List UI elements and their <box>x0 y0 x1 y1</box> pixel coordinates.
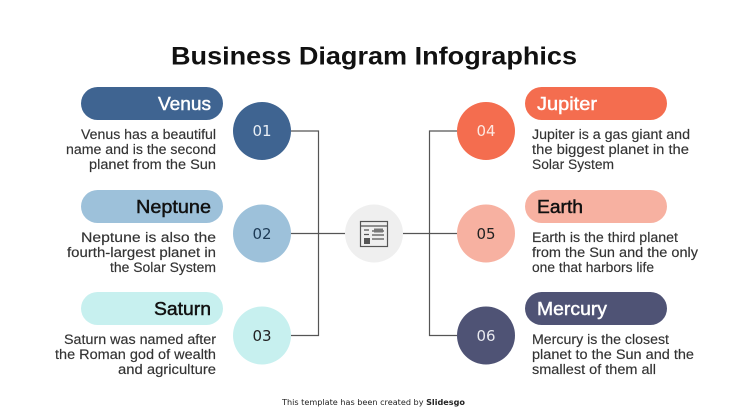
text: Neptune description: Neptune is also the <box>81 230 216 245</box>
number circle 06: 06 <box>476 327 496 345</box>
heading: Earth: Earth <box>537 197 583 217</box>
heading: Earth <box>525 190 667 223</box>
text: Venus description: planet from the Sun <box>89 157 216 172</box>
number circle 01 <box>233 102 291 160</box>
connector lines <box>291 131 457 336</box>
panel: Neptune <box>67 190 291 275</box>
number circle 05: 05 <box>476 225 496 243</box>
number circle 04 <box>457 102 515 160</box>
number circle 02 <box>233 204 291 262</box>
heading: Mercury <box>525 292 667 325</box>
heading: Mercury: Mercury <box>537 299 607 319</box>
text: Neptune description: fourth-largest planet in <box>67 245 216 260</box>
heading: Venus <box>81 87 223 120</box>
heading: Saturn <box>81 292 223 325</box>
heading: Neptune: Neptune <box>136 197 211 217</box>
text: Jupiter description: Jupiter is a gas giant and <box>532 127 690 142</box>
text: Mercury description: planet to the Sun and the <box>532 347 694 362</box>
number circle 04: 04 <box>476 122 496 140</box>
icon: central browser dashboard <box>345 204 403 262</box>
heading: Saturn: Saturn <box>154 299 211 319</box>
number circle 01: 01 <box>252 122 272 140</box>
text: Saturn description: and agriculture <box>118 362 216 377</box>
number circle 02: 02 <box>252 225 272 243</box>
title: Business Diagram Infographics <box>171 42 577 70</box>
text: Jupiter description: Solar System <box>532 157 614 172</box>
heading: Venus: Venus <box>158 94 211 114</box>
text: Venus description: Venus has a beautiful <box>81 127 216 142</box>
text: Mercury description: Mercury is the closest <box>532 332 669 347</box>
text: Earth description: one that harbors life <box>532 260 654 275</box>
panel: Venus <box>66 87 291 172</box>
panel: Saturn <box>55 292 291 377</box>
text: Neptune description: the Solar System <box>110 260 216 275</box>
panel: Earth <box>457 190 698 275</box>
number circle 03: 03 <box>252 327 272 345</box>
footer credit: This template has been created by Slidesgo <box>281 398 466 407</box>
heading: Neptune <box>81 190 223 223</box>
panel: Jupiter <box>457 87 690 172</box>
text: Jupiter description: the biggest planet in the <box>532 142 689 157</box>
heading: Jupiter <box>525 87 667 120</box>
number circle 06 <box>457 306 515 364</box>
text: Earth description: from the Sun and the only <box>532 245 698 260</box>
text: Earth description: Earth is the third planet <box>532 230 678 245</box>
heading: Jupiter: Jupiter <box>537 94 597 114</box>
text: Mercury description: smallest of them all <box>532 362 656 377</box>
text: Venus description: name and is the second <box>66 142 216 157</box>
panel: Mercury <box>457 292 694 377</box>
text: Saturn description: Saturn was named after <box>64 332 217 347</box>
number circle 03 <box>233 306 291 364</box>
number circle 05 <box>457 204 515 262</box>
text: Saturn description: the Roman god of wealth <box>55 347 216 362</box>
